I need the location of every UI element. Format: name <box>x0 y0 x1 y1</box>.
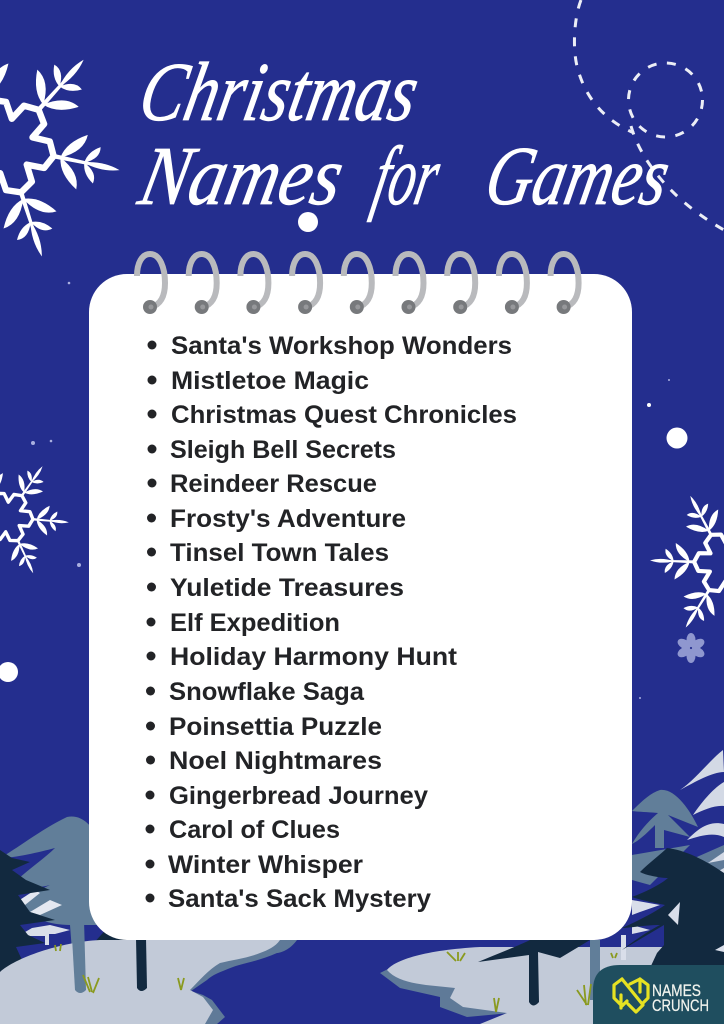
logo: Names Crunch <box>593 965 724 1024</box>
winter scene: right trees and hill <box>380 750 724 1024</box>
logo wordmark: NAMES <box>652 982 701 1000</box>
list of game names: Sleigh Bell Secrets <box>170 436 396 464</box>
list of game names: Gingerbread Journey <box>169 782 428 810</box>
title: Games <box>478 130 678 223</box>
list of game names: Holiday Harmony Hunt <box>170 643 458 671</box>
list of game names: Poinsettia Puzzle <box>169 713 382 741</box>
mid tree trunk <box>590 940 600 1000</box>
grass <box>55 944 184 993</box>
snowflake: right <box>647 485 724 641</box>
list of game names: Carol of Clues <box>169 816 340 844</box>
list of game names <box>146 332 517 913</box>
list of game names: Frosty's Adventure <box>170 505 406 533</box>
list of game names: Winter Whisper <box>168 851 363 879</box>
large dark tree <box>622 848 724 975</box>
title: Christmas <box>132 46 427 139</box>
list of game names: Mistletoe Magic <box>171 367 369 395</box>
dark tree far left <box>0 850 55 972</box>
list of game names: Yuletide Treasures <box>170 574 404 602</box>
list of game names: Christmas Quest Chronicles <box>171 401 517 429</box>
snow hill shadow <box>160 940 297 1024</box>
notebook card <box>89 274 632 940</box>
decorative dots <box>0 212 688 699</box>
list of game names: Santa's Workshop Wonders <box>171 332 512 360</box>
mid tree left <box>0 817 98 992</box>
pale tree snow flecks <box>708 852 724 876</box>
winter scene: left trees and hill <box>0 817 297 1024</box>
dark tree trunk <box>136 938 147 991</box>
snow hill <box>0 940 280 1024</box>
snow flecks on dark tree <box>668 902 724 952</box>
spiral binding rings <box>137 254 579 314</box>
title: Names <box>131 130 352 223</box>
mid tree trunk <box>71 920 86 993</box>
list of game names: Noel Nightmares <box>169 747 382 775</box>
logo icon <box>614 979 648 1012</box>
list of game names: Reindeer Rescue <box>170 470 377 498</box>
logo wordmark <box>652 982 709 1015</box>
grass <box>447 952 617 1012</box>
dark tree behind card <box>92 920 195 945</box>
small pale snowflake <box>676 633 706 663</box>
pale tree trunk <box>621 935 626 960</box>
list of game names: Snowflake Saga <box>169 678 365 706</box>
title: for <box>366 130 448 223</box>
pale tree boughs <box>680 750 724 840</box>
list of game names: Tinsel Town Tales <box>170 539 389 567</box>
list of game names: Santa's Sack Mystery <box>168 885 431 913</box>
mid tree lower bough <box>632 845 690 885</box>
snowflake: top left <box>0 10 143 282</box>
pale boughs near card <box>632 900 660 934</box>
dashed flight path and loop <box>574 0 724 230</box>
snow hill shadow <box>380 968 510 1017</box>
list of game names: Elf Expedition <box>170 609 340 637</box>
mid tree <box>632 790 698 848</box>
centre dark tree <box>478 940 590 1006</box>
pale small tree <box>20 925 70 945</box>
title <box>131 46 678 223</box>
pale tree lower bough <box>690 845 724 880</box>
logo wordmark: CRUNCH <box>652 997 709 1015</box>
snow hill <box>387 947 724 1024</box>
snowflake: middle left <box>0 451 74 583</box>
